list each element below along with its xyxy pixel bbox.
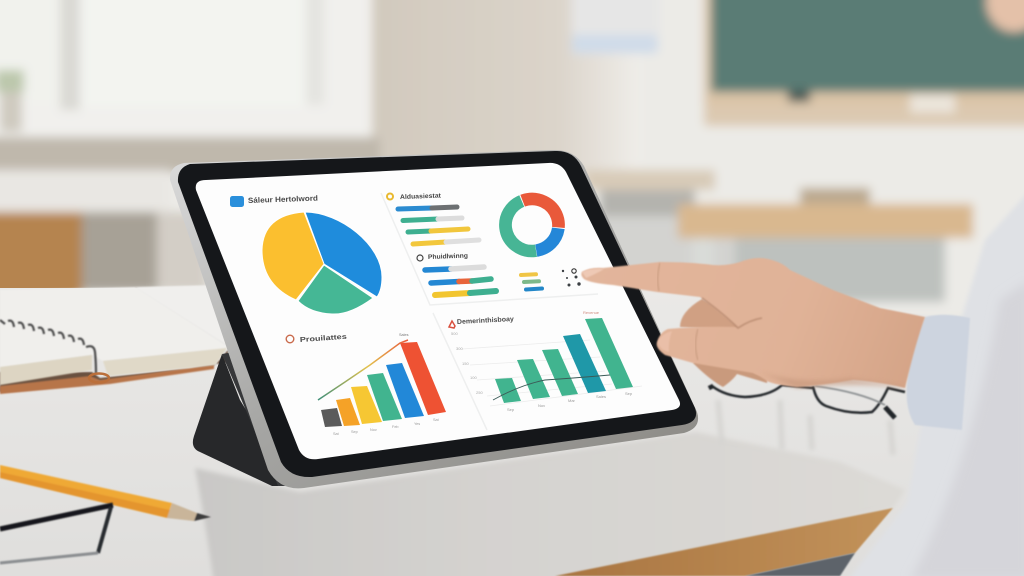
tablet stand	[193, 354, 292, 486]
window	[0, 0, 380, 173]
y axis labels: 500	[451, 331, 458, 336]
trend line	[318, 340, 408, 400]
middle table	[585, 170, 740, 296]
bars heading: Alduasiestat	[400, 193, 442, 201]
x labels: Sep	[507, 407, 515, 412]
donut legend	[521, 274, 542, 290]
pie icon	[230, 196, 244, 207]
spiral binding	[0, 320, 96, 374]
pointing hand	[581, 258, 925, 388]
fingernail: index	[582, 269, 604, 278]
x labels: Mar	[568, 398, 576, 403]
pencil	[0, 465, 211, 521]
pie chart	[262, 212, 382, 314]
plant on sill	[0, 70, 24, 92]
hand body	[581, 258, 925, 388]
faint glasses reflection	[718, 400, 893, 455]
y axis labels: 100	[470, 375, 477, 380]
x labels: Sales	[596, 394, 606, 399]
growth line	[493, 375, 610, 400]
growth bar chart panel	[449, 310, 642, 412]
curled middle finger	[680, 299, 740, 330]
axis labels: Sales	[399, 333, 409, 337]
rising chart icon	[286, 335, 294, 343]
colored bars	[321, 408, 342, 427]
desk glasses	[710, 385, 905, 418]
axis labels: Nov	[370, 428, 377, 432]
rising bar chart panel	[286, 333, 446, 436]
tablet bezel	[178, 151, 696, 477]
desk surface	[0, 288, 1024, 576]
wall poster	[572, 0, 660, 54]
second bars icon	[417, 255, 423, 261]
small icons near fingertip	[562, 269, 581, 286]
axis labels: Sat	[433, 418, 440, 422]
x labels: Sep	[625, 391, 633, 396]
y axis labels: 150	[462, 361, 469, 366]
grid lines	[462, 340, 642, 406]
notebook loop	[89, 374, 109, 382]
pie chart panel	[230, 194, 382, 314]
x labels	[507, 310, 633, 412]
lower curled finger	[693, 350, 770, 387]
axis labels: Sat	[333, 432, 340, 436]
rising chart heading: Prouilattes	[300, 334, 347, 344]
x labels: Revenue	[583, 310, 600, 315]
y axis labels: 250	[476, 390, 483, 395]
palm shadow	[760, 372, 905, 388]
second bars heading: Phuidlwinng	[428, 253, 468, 261]
growth chart heading: Demerinthisboay	[457, 316, 514, 326]
axis labels	[333, 333, 440, 436]
tablet	[170, 150, 698, 488]
sleeve and torso	[848, 190, 1024, 576]
notebook	[0, 285, 228, 394]
knuckle shadow	[702, 298, 762, 328]
fingernail: ring	[658, 331, 672, 352]
skin at top right corner	[986, 0, 1024, 32]
axis labels: Sep	[351, 430, 358, 434]
axis labels: Feb	[392, 425, 399, 429]
tablet screen	[196, 163, 680, 459]
left classroom table	[0, 170, 207, 300]
shirt cuff	[907, 315, 970, 430]
blackboard	[704, 0, 1024, 126]
glasses, bottom left	[0, 505, 113, 563]
y axis labels	[451, 331, 483, 395]
desk wooden edge	[555, 508, 893, 576]
pie heading: Sáleur Hertolword	[248, 194, 318, 205]
blurred classroom background	[0, 0, 1024, 320]
right table	[678, 188, 973, 302]
tablet silver edge	[170, 150, 698, 488]
growth chart icon	[449, 321, 455, 328]
x labels: Nov	[538, 403, 545, 408]
y axis labels: 300	[456, 346, 463, 351]
bars icon	[387, 194, 393, 200]
progress bars panel	[387, 193, 496, 295]
desk reflection	[195, 432, 905, 576]
notebook pages	[0, 355, 92, 385]
dark under desk	[745, 553, 855, 576]
donut chart	[498, 192, 566, 258]
axis labels: Yes	[414, 422, 420, 426]
bars	[495, 378, 521, 403]
shirt body highlight	[910, 280, 1024, 576]
panel dividers	[381, 193, 598, 430]
ring finger with nail	[657, 326, 775, 376]
